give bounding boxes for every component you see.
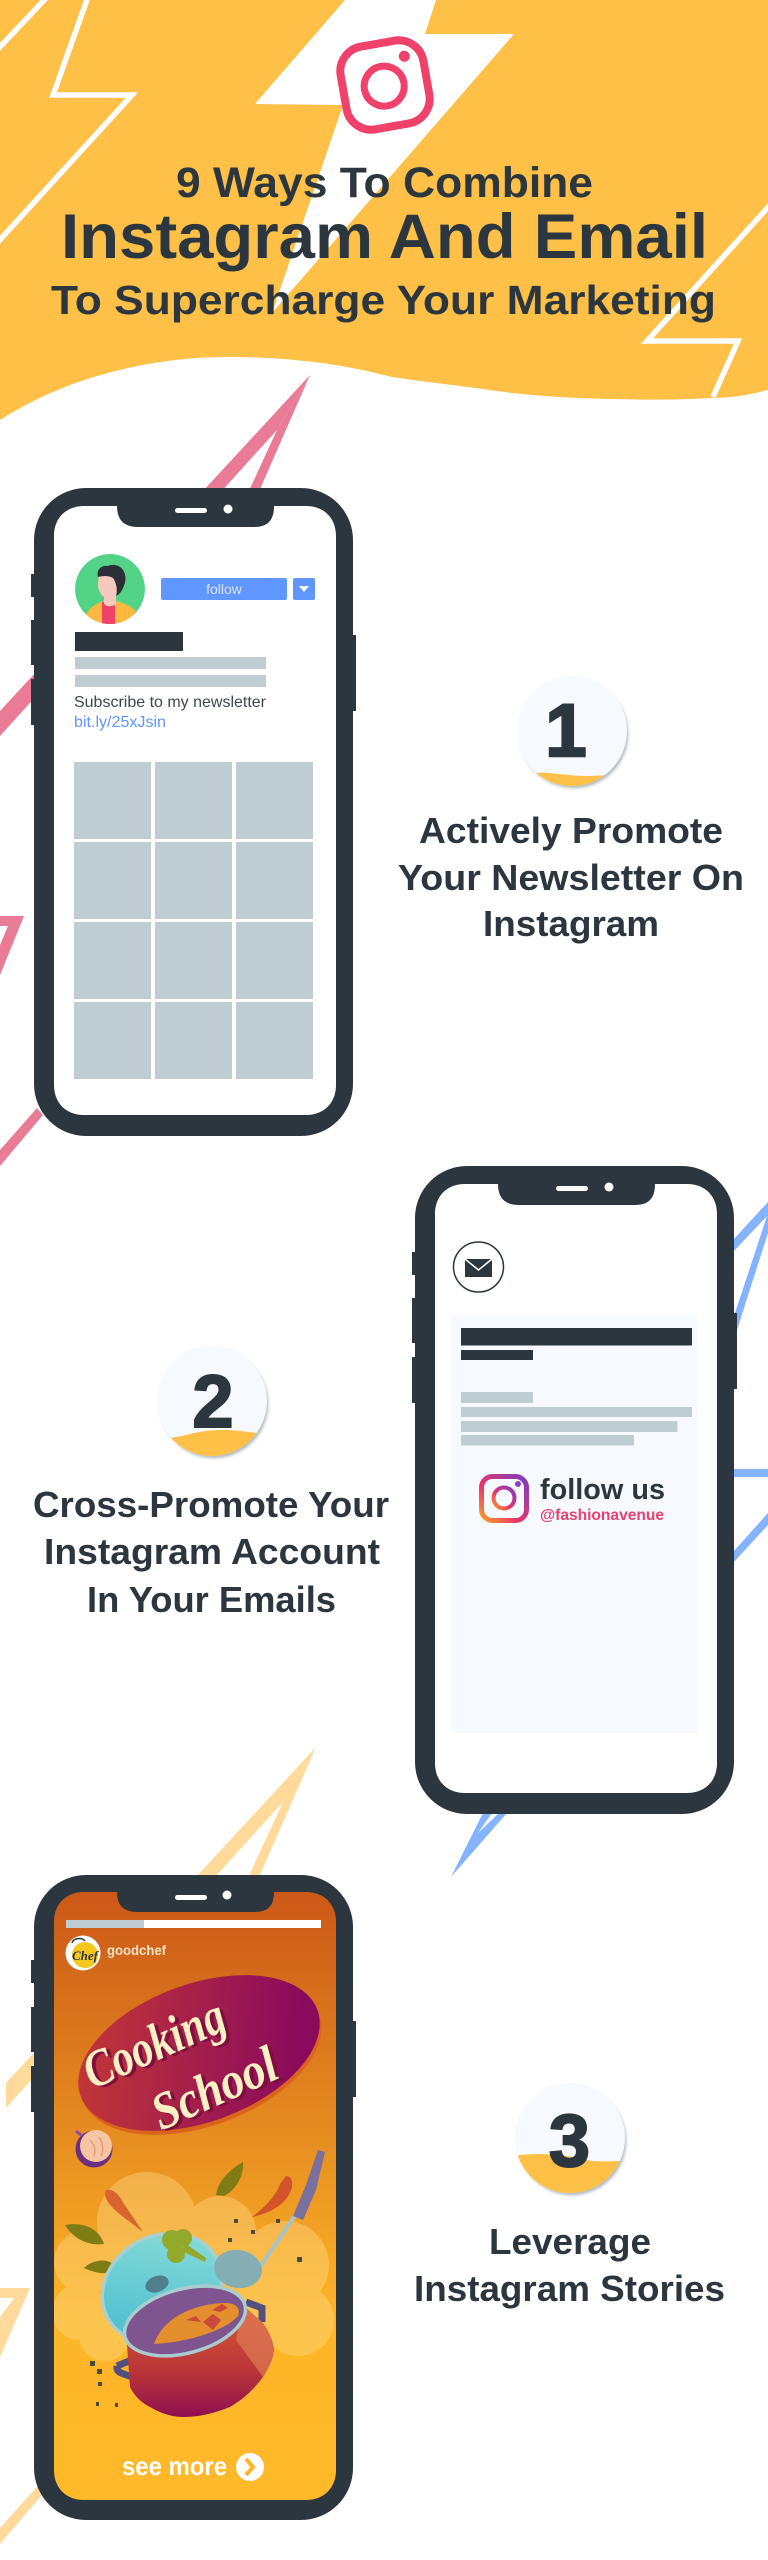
- heading 2: Cross-Promote Your: [33, 1484, 389, 1525]
- heading 2: Instagram Account: [44, 1531, 380, 1572]
- panel: step 3 phone: [31, 1875, 356, 2520]
- avatar: [75, 554, 145, 626]
- title: To Supercharge Your Marketing: [51, 277, 716, 323]
- cooking school oval: Cooking: [78, 1989, 238, 2102]
- bio link: bit.ly/25xJsin: [74, 714, 166, 731]
- number badge 2: 2: [192, 1360, 234, 1443]
- number badge 3: 3: [549, 2099, 590, 2182]
- blue lightning bolt background: [451, 1202, 768, 1877]
- see more arrow: [236, 2453, 264, 2481]
- heading 2: In Your Emails: [87, 1579, 336, 1620]
- icon: instagram logo: [336, 36, 434, 134]
- leaf 3: [84, 2261, 113, 2273]
- cooking school oval: [57, 1945, 343, 2165]
- heading 1: [398, 810, 744, 944]
- title: Instagram And Email: [61, 202, 708, 272]
- lightning bolt: left outline: [0, 0, 132, 243]
- leaf 2: [65, 2224, 104, 2244]
- number badge 2: [157, 1346, 268, 1460]
- instagram handle: @fashionavenue: [540, 1507, 664, 1524]
- heading 3: Instagram Stories: [414, 2268, 725, 2309]
- cooking school oval: School: [147, 2037, 291, 2143]
- panel: step 2 phone: [412, 1166, 737, 1814]
- title: [51, 159, 716, 323]
- follow button: [161, 578, 315, 600]
- number badge 3: [512, 2083, 630, 2200]
- cooking school oval: Cooking: [74, 1987, 234, 2100]
- pot highlight facet: [236, 2305, 274, 2377]
- number badge 1: 1: [545, 689, 587, 772]
- chef logo: [66, 1936, 100, 1970]
- heading 1: Actively Promote: [419, 810, 723, 851]
- heading 1: Your Newsletter On: [398, 857, 744, 898]
- soup: [154, 2303, 239, 2344]
- photo grid: [74, 762, 313, 1079]
- see more label: see more: [122, 2451, 227, 2481]
- lightning bolt: white center: [255, 0, 514, 313]
- icon: envelope: [454, 1242, 504, 1292]
- cooking school oval: School: [143, 2036, 287, 2142]
- leaf 1: [216, 2162, 243, 2196]
- heading 3: [414, 2221, 725, 2309]
- carrot: [105, 2190, 143, 2232]
- number badge 1: [517, 676, 630, 790]
- bio text: Subscribe to my newsletter: [74, 694, 267, 711]
- story progress bar: [66, 1920, 321, 1928]
- phone frame 3: [31, 1875, 356, 2520]
- phone frame 1: [31, 488, 356, 1136]
- pink lightning bolt background: [0, 375, 310, 1166]
- email body panel: [451, 1314, 698, 1733]
- heading 3: Leverage: [489, 2221, 651, 2262]
- icon: instagram gradient: [482, 1476, 526, 1520]
- phone frame 2: [412, 1166, 737, 1814]
- heading 1: Instagram: [483, 903, 659, 944]
- pot rim: [122, 2284, 248, 2358]
- spice specks: [90, 2219, 302, 2407]
- lightning bolt: right outline: [647, 204, 768, 397]
- account name: goodchef: [107, 1942, 166, 1958]
- pot body: [127, 2305, 274, 2417]
- broccoli: [162, 2229, 206, 2263]
- follow us text: follow us: [540, 1474, 665, 1506]
- panel: step 1 phone: [31, 488, 356, 1136]
- heading 2: [33, 1484, 389, 1620]
- icon: onion: [76, 2130, 112, 2168]
- pot of soup illustration: [65, 2150, 325, 2417]
- steam clouds: [52, 2172, 334, 2361]
- header banner: [0, 0, 768, 420]
- yellow lightning bolt background: [0, 1747, 316, 2544]
- email text bars: [461, 1328, 692, 1446]
- pot handles: [113, 2358, 130, 2380]
- chili: [252, 2176, 292, 2217]
- chef logo: Chef: [72, 1948, 100, 1963]
- follow button: follow: [206, 581, 243, 597]
- ladle: [258, 2214, 296, 2270]
- profile name and bio bars: [75, 632, 266, 687]
- title: 9 Ways To Combine: [176, 159, 593, 207]
- lid: [100, 2232, 224, 2336]
